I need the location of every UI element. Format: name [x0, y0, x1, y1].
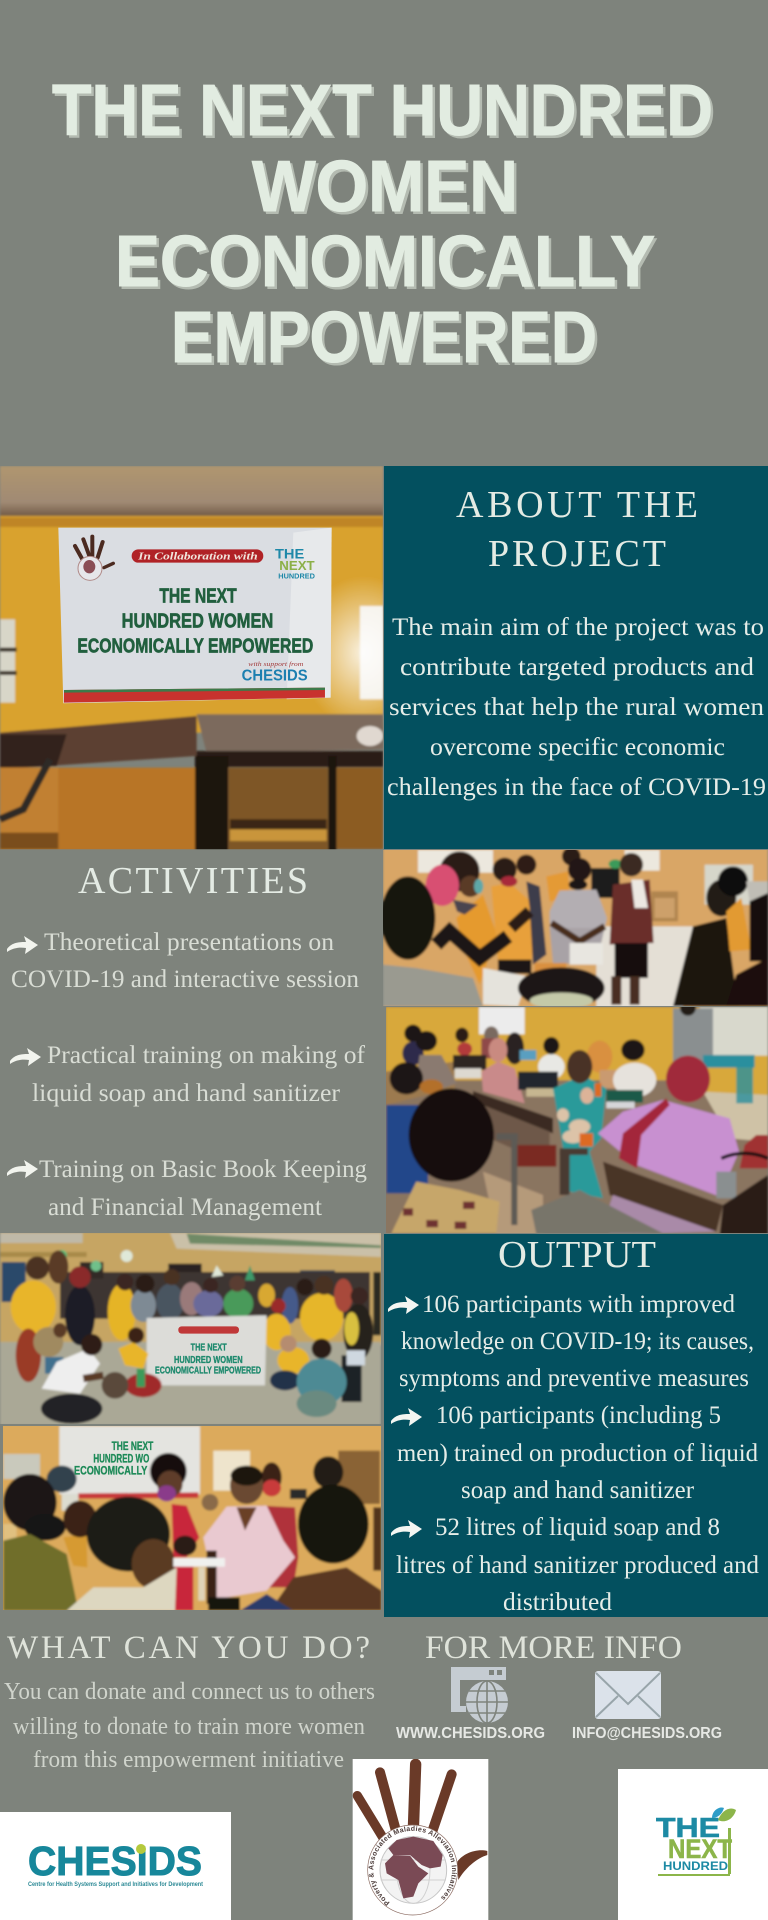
banner: ECONOMICALLY EMPOWERED — [77, 635, 313, 658]
banner — [58, 528, 332, 703]
activity 3 — [7, 1156, 367, 1221]
banner text — [155, 1326, 261, 1376]
banner: In Collaboration with — [137, 551, 258, 562]
title — [52, 71, 713, 378]
icon: website globe — [451, 1667, 508, 1723]
logo: CHESIDS: CHESIDS — [28, 1838, 202, 1884]
heading: about the project: PROJECT — [488, 533, 666, 575]
banner logo hand — [75, 537, 113, 580]
heading: what can you do: WHAT CAN YOU DO? — [7, 1630, 370, 1666]
heading: about the project — [456, 484, 698, 575]
logo: Poverty and Associated Maladies Alleviation Initiatives hand: Poverty & Associated Maladies Alleviation Initiatives — [368, 1826, 457, 1906]
text: project aim: The main aim of the project was to — [392, 614, 764, 641]
output 2: 106 participants (including 5 — [436, 1402, 721, 1429]
output 2: men) trained on production of liquid — [397, 1440, 758, 1467]
heading: about the project: ABOUT THE — [456, 484, 698, 526]
banner text: HUNDRED WOMEN — [174, 1355, 243, 1366]
title: EMPOWERED — [171, 298, 597, 378]
output 3: 52 litres of liquid soap and 8 — [435, 1514, 720, 1541]
output 3 — [391, 1514, 759, 1616]
panel: what can you do — [4, 1630, 375, 1773]
text: project aim: overcome specific economic — [430, 734, 725, 761]
text: call to donate: willing to donate to train more women — [13, 1714, 365, 1740]
activity 1: COVID-19 and interactive session — [11, 966, 359, 993]
panel: about the project — [384, 466, 768, 849]
text: project aim — [387, 614, 766, 801]
text: project aim: contribute targeted products and — [400, 654, 755, 681]
photo: project banner in classroom — [0, 466, 383, 850]
logo: Poverty and Associated Maladies Alleviation Initiatives hand — [352, 1759, 488, 1920]
icon: envelope — [595, 1671, 661, 1719]
text: call to donate — [4, 1679, 375, 1773]
panel: activities — [7, 860, 367, 1221]
heading: for more info: FOR MORE INFO — [425, 1630, 682, 1666]
activity 1 — [7, 929, 359, 993]
banner: with support from — [248, 661, 304, 668]
output 2 — [391, 1402, 758, 1504]
banner: HUNDRED WOMEN — [122, 610, 273, 633]
logo: The Next Hundred — [618, 1769, 768, 1920]
heading: activities: ACTIVITIES — [78, 860, 308, 902]
output 3: litres of hand sanitizer produced and — [396, 1552, 759, 1579]
banner text — [74, 1441, 154, 1475]
output 2: soap and hand sanitizer — [461, 1477, 695, 1504]
banner: THE — [275, 546, 304, 562]
heading: output: OUTPUT — [498, 1234, 656, 1276]
banner text: THE NEXT — [112, 1439, 154, 1453]
output 1 — [388, 1291, 754, 1392]
text: call to donate: from this empowerment initiative — [33, 1747, 344, 1773]
output 3: distributed — [503, 1589, 613, 1616]
photo: trainer with participants — [0, 1424, 385, 1614]
title: ECONOMICALLY — [115, 222, 655, 302]
photo: classroom session — [383, 1000, 768, 1235]
logo: The Next Hundred: HUNDRED — [663, 1859, 728, 1873]
title: WOMEN — [252, 147, 518, 227]
banner text: ECONOMICALLY EMPOWERED — [155, 1365, 261, 1376]
email address: INFO@CHESIDS.ORG — [572, 1725, 722, 1742]
output 1: 106 participants with improved — [422, 1291, 735, 1318]
title: THE NEXT HUNDRED — [52, 71, 713, 151]
photo: participants around soap bucket — [381, 847, 768, 1009]
banner: HUNDRED — [278, 572, 315, 581]
banner text: ECONOMICALLY — [74, 1464, 147, 1478]
banner text: THE NEXT — [191, 1343, 227, 1354]
output 1: knowledge on COVID-19; its causes, — [401, 1328, 754, 1355]
logo: The Next Hundred: THE — [656, 1812, 720, 1843]
text: project aim: services that help the rural women — [389, 694, 765, 721]
text: project aim: challenges in the face of COVID-19 — [387, 774, 766, 801]
activity 2 — [10, 1042, 366, 1107]
output 1: symptoms and preventive measures — [399, 1365, 749, 1392]
logo: CHESIDS — [0, 1812, 231, 1920]
panel: for more info — [396, 1630, 722, 1742]
website address: WWW.CHESIDS.ORG — [396, 1725, 545, 1742]
banner text: HUNDRED WO — [93, 1451, 149, 1465]
panel: output — [384, 1234, 768, 1617]
banner: NEXT — [279, 558, 315, 573]
logo: CHESIDS: Centre for Health Systems Support and Initiatives for Development — [28, 1882, 203, 1888]
activity 3: and Financial Management — [48, 1194, 322, 1221]
photo: group portrait with banner — [0, 1232, 385, 1425]
logo: The Next Hundred: NEXT — [668, 1834, 732, 1864]
activity 3: Training on Basic Book Keeping — [39, 1156, 367, 1183]
activity 2: liquid soap and hand sanitizer — [32, 1080, 341, 1107]
activity 2: Practical training on making of — [47, 1042, 366, 1069]
text: call to donate: You can donate and connect us to others — [4, 1679, 375, 1705]
banner: THE NEXT — [159, 585, 237, 608]
activity 1: Theoretical presentations on — [44, 929, 335, 956]
banner: CHESIDS — [242, 667, 308, 684]
